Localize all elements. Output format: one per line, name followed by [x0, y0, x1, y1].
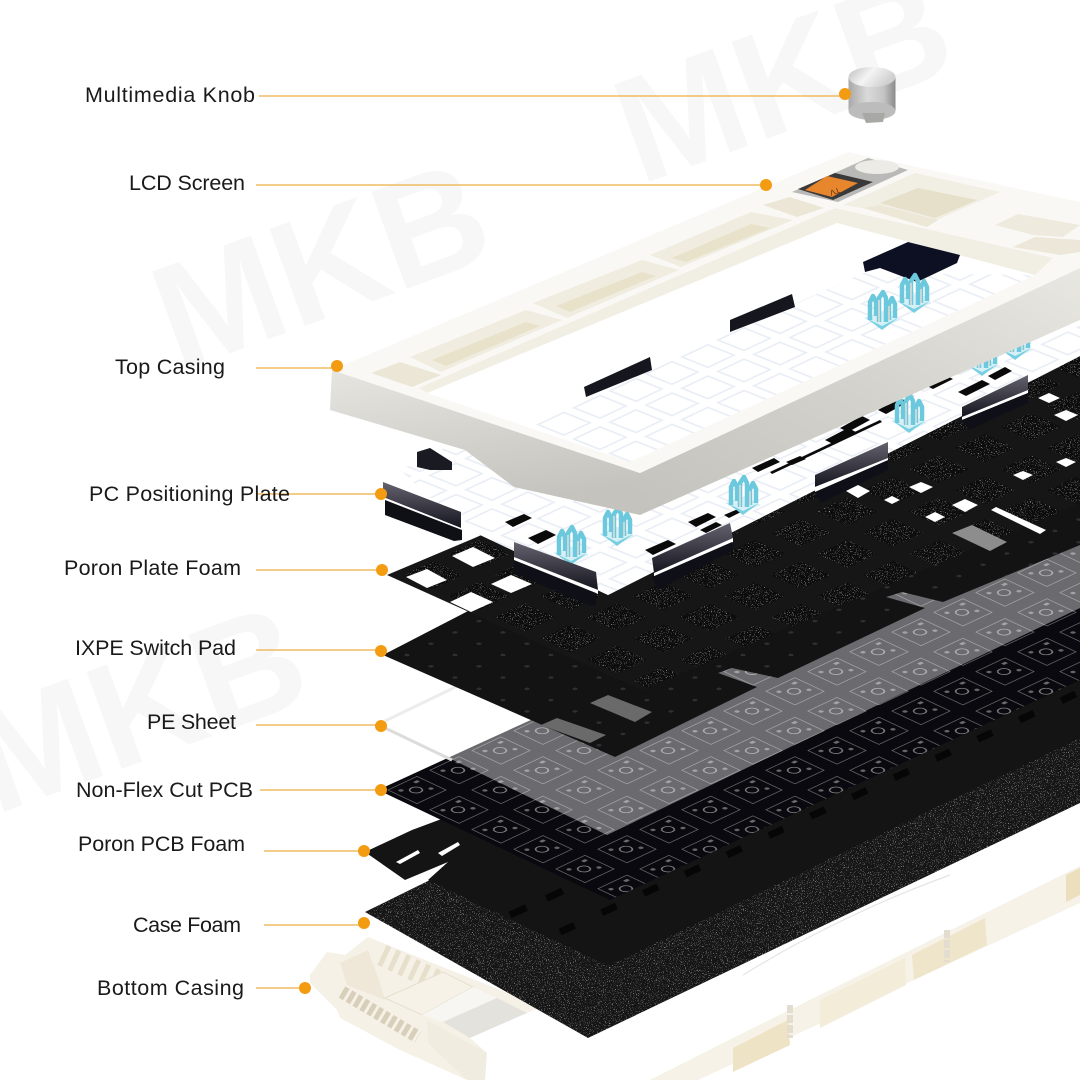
pocket	[410, 310, 562, 372]
switch	[725, 477, 761, 515]
callout: Bottom Casing: Bottom Casing	[97, 976, 244, 1000]
switch	[864, 292, 900, 330]
callout: Case Foam	[133, 913, 370, 937]
wall pocket	[820, 958, 906, 1028]
callout: Poron Plate Foam	[64, 556, 388, 580]
wall pocket	[733, 1020, 790, 1072]
stabilizer 3	[652, 523, 733, 590]
switch	[896, 275, 932, 313]
callout: PC Positioning Plate: PC Positioning Plate	[89, 482, 290, 506]
casing left end	[310, 937, 660, 1080]
pocket	[763, 197, 824, 217]
callout: Non-Flex Cut PCB: Non-Flex Cut PCB	[76, 778, 253, 802]
stabilizer 4	[815, 442, 888, 503]
inner tray	[385, 972, 473, 1015]
PE sheet	[381, 380, 1080, 835]
top casing	[330, 152, 1080, 515]
poron PCB foam	[365, 590, 1080, 966]
rear stabilizer	[417, 448, 452, 470]
wall pocket	[1066, 868, 1080, 902]
casing opening	[427, 223, 1035, 462]
black stabilizer bar	[584, 357, 652, 397]
switch	[891, 395, 927, 433]
callout: Top Casing: Top Casing	[115, 355, 225, 379]
callout: Bottom Casing	[97, 976, 311, 1000]
callout: Non-Flex Cut PCB	[76, 778, 387, 802]
callout: PE Sheet	[147, 710, 387, 734]
callout: Top Casing	[115, 355, 343, 379]
case foam	[365, 690, 1080, 1038]
right wall	[650, 866, 1080, 1080]
callout: Multimedia Knob	[85, 83, 851, 107]
pocket	[371, 362, 441, 387]
interior wall	[340, 950, 385, 1000]
multimedia knob	[848, 67, 896, 123]
stabilizer 1	[383, 482, 462, 541]
callout: Case Foam: Case Foam	[133, 913, 241, 937]
floor scratch	[743, 875, 950, 975]
callout: Poron PCB Foam: Poron PCB Foam	[78, 832, 245, 856]
ribbed rail	[342, 992, 418, 1037]
switch	[553, 527, 589, 565]
interior ribs	[382, 955, 440, 982]
callout: IXPE Switch Pad	[75, 636, 387, 660]
black switch block	[863, 242, 960, 282]
pocket	[1013, 237, 1080, 255]
callout: IXPE Switch Pad: IXPE Switch Pad	[75, 636, 236, 660]
pocket	[843, 173, 1000, 227]
bottom casing	[310, 770, 1080, 1080]
watermarks: MKB	[131, 127, 510, 402]
casing inner lip	[419, 208, 1053, 393]
callout: Poron PCB Foam	[78, 832, 370, 857]
stabilizer 5	[962, 375, 1028, 430]
end wall	[427, 1020, 487, 1080]
switch	[599, 508, 635, 546]
floor	[470, 770, 1080, 1080]
poron plate foam	[387, 260, 1080, 690]
callout: PC Positioning Plate	[89, 482, 387, 506]
non-flex cut PCB	[378, 470, 1080, 900]
LCD screen: TV	[828, 185, 841, 198]
switch	[997, 322, 1033, 360]
wall pocket	[912, 918, 987, 980]
callout: Multimedia Knob: Multimedia Knob	[85, 83, 255, 107]
callout: LCD Screen	[129, 171, 772, 195]
callout: LCD Screen: LCD Screen	[129, 171, 245, 195]
LCD screen	[792, 158, 908, 202]
watermarks	[0, 0, 972, 845]
callout: Poron Plate Foam: Poron Plate Foam	[64, 556, 241, 580]
wall clip	[944, 930, 950, 962]
stabilizer 2	[514, 542, 598, 606]
black stabilizer bar	[730, 294, 795, 332]
IXPE switch pad	[383, 320, 1080, 757]
pocket	[533, 260, 679, 318]
pocket	[650, 212, 793, 267]
switch	[964, 338, 1000, 376]
casing left wall	[330, 370, 640, 515]
callout: PE Sheet: PE Sheet	[147, 710, 236, 734]
wall clip	[787, 1005, 793, 1038]
casing front wall	[640, 268, 1080, 515]
casing top surface	[332, 152, 1080, 473]
PC positioning plate	[400, 240, 1080, 595]
pocket	[995, 214, 1080, 237]
